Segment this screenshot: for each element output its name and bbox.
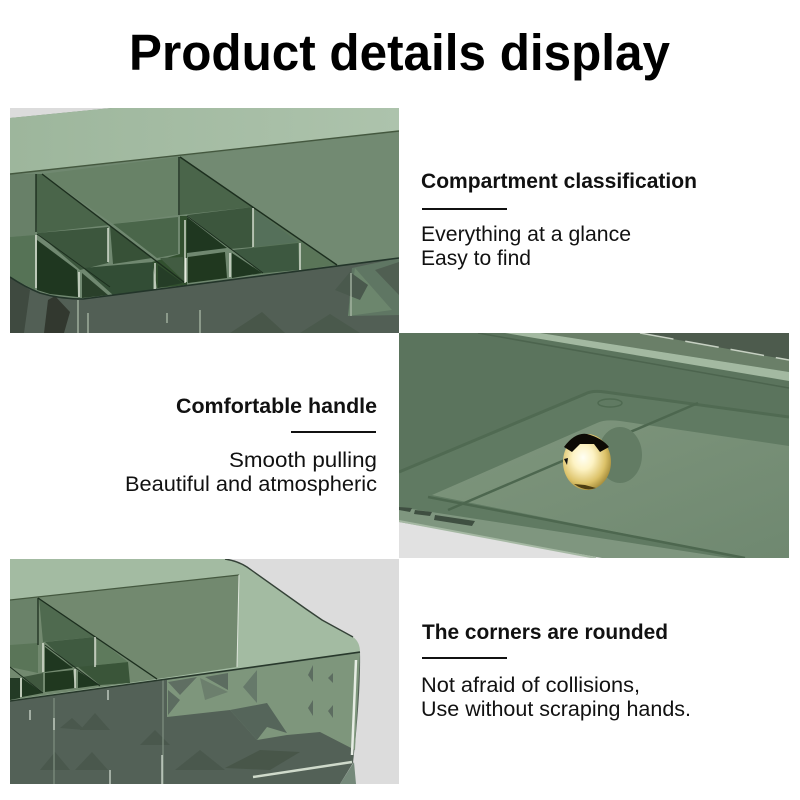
panel: rounded corner photo: [10, 559, 399, 784]
panel: compartment photo: [10, 108, 399, 333]
text block: comfortable handle: [125, 395, 377, 496]
title: Product details display: [129, 24, 671, 81]
rim and front: [10, 258, 399, 333]
upper right compartments: [542, 333, 789, 372]
icon: gold knob: [563, 434, 611, 490]
text block: compartment classification: Everything at a glance: [421, 223, 631, 246]
front: [10, 652, 360, 784]
bottom grey: [399, 507, 729, 558]
text block: compartment classification: Compartment classification: [421, 170, 697, 193]
panel: handle photo: [399, 333, 789, 558]
text block: compartment classification: Easy to find: [421, 247, 531, 270]
text block: comfortable handle: Comfortable handle: [176, 395, 377, 418]
text block: comfortable handle: Smooth pulling: [229, 449, 377, 472]
tray floor: [432, 420, 789, 558]
ball shadow: [598, 427, 642, 483]
text block: comfortable handle: Beautiful and atmospheric: [125, 473, 377, 496]
text block: rounded corners: Use without scraping hands.: [421, 698, 691, 721]
tray ledge: [399, 391, 789, 558]
text block: rounded corners: The corners are rounded: [422, 621, 668, 644]
dark diagonal lines: [10, 131, 399, 287]
text block: rounded corners: [421, 621, 691, 721]
text block: compartment classification: [421, 170, 697, 270]
top surface: [10, 559, 360, 702]
text block: rounded corners: Not afraid of collisions,: [421, 674, 640, 697]
